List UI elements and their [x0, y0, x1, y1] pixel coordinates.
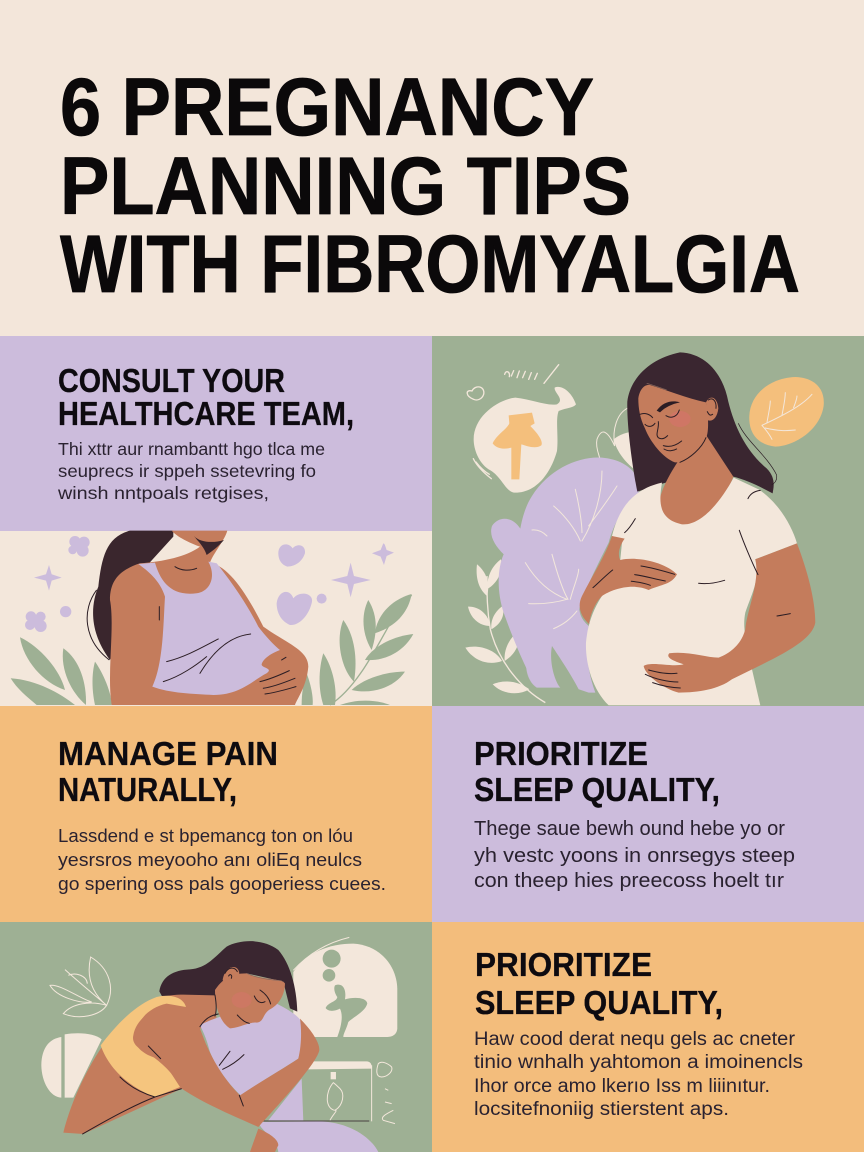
text block: second sleep quality body: tinio wnhalh yahtomon a imoinencls [474, 1052, 803, 1073]
left arm and hand [580, 536, 677, 624]
text block: consult body [57, 439, 325, 503]
figure: sleeping woman hugging pillow [63, 941, 378, 1152]
heading: manage pain naturally: MANAGE PAIN [58, 735, 278, 772]
heading: prioritize sleep quality second [475, 946, 723, 1021]
text block: consult body: seuprecs ir sppeh ssetevring fo [58, 461, 316, 481]
title: 6 PREGNANCY [60, 62, 594, 153]
arm [133, 1008, 319, 1127]
text block: sleep quality body: yh vestc yoons in onrsegys steep [474, 845, 795, 867]
text block: second sleep quality body: locsitefnoniig stierstent aps. [474, 1099, 729, 1120]
icon: cream arch with green shapes [293, 937, 397, 1037]
shirt [586, 478, 797, 705]
text block: sleep quality body: Thege saue bewh ound hebe yo or [474, 818, 785, 840]
heading: consult your healthcare team [58, 362, 354, 432]
heading: prioritize sleep quality second: PRIORITIZE [475, 946, 652, 983]
pillow [200, 1004, 302, 1095]
head [200, 967, 285, 1028]
icon: lilac flowers and sparkles [25, 536, 394, 632]
panel: consult your healthcare team [0, 336, 432, 531]
panel: manage pain naturally [0, 706, 432, 922]
heading: prioritize sleep quality: PRIORITIZE [474, 735, 648, 772]
panel: title background [0, 0, 864, 336]
panel: standing pregnant woman illustration [432, 336, 864, 706]
icon: monitor frame [308, 1061, 395, 1124]
icon: outlined flower [50, 957, 111, 1017]
heading: prioritize sleep quality second: SLEEP QUALITY, [475, 984, 723, 1021]
panel: prioritize sleep quality (lilac) [432, 706, 864, 922]
text block: second sleep quality body [474, 1029, 803, 1120]
text block: consult body: winsh nntpoals retgises, [57, 483, 269, 503]
right arm and hand [644, 543, 815, 693]
icon: orange leaf [749, 377, 824, 447]
panel: sleeping woman illustration [0, 922, 432, 1152]
panel: prioritize sleep quality (orange) [432, 922, 864, 1152]
icon: large lilac leaf [491, 458, 639, 693]
heading: consult your healthcare team: CONSULT YOUR [58, 362, 285, 399]
text block: sleep quality body: con theep hies preecoss hoelt tır [474, 870, 784, 892]
text block: second sleep quality body: Ihor orce amo lkerıo Iss m liiinıtur. [474, 1076, 770, 1097]
icon: bulb shape with orange arrow [467, 365, 576, 493]
head: hair, neck and face [627, 352, 777, 532]
icon: green leaves [11, 594, 413, 705]
figure: woman side view [87, 531, 308, 705]
heading: manage pain naturally [58, 735, 278, 808]
text block: manage pain body: go spering oss pals gooperiess cuees. [58, 874, 386, 894]
title: PLANNING TIPS [60, 141, 631, 232]
panel: side-view pregnant woman illustration [0, 531, 432, 706]
icon: split cream pill [41, 1033, 102, 1098]
icon: cream blob and loop line behind head [597, 408, 637, 471]
text block: manage pain body: yesrsros meyooho anı oliEq neulcs [58, 850, 362, 870]
text block: consult body: Thi xttr aur rnambantt hgo tlca me [58, 439, 325, 459]
clothing and finger lines [593, 490, 790, 688]
text block: sleep quality body [474, 818, 795, 892]
heading: prioritize sleep quality: SLEEP QUALITY, [474, 771, 720, 808]
text block: manage pain body: Lassdend e st bpemancg ton on lóu [58, 826, 353, 846]
text block: second sleep quality body: Haw cood derat nequ gels ac cneter [474, 1029, 796, 1050]
heading: manage pain naturally: NATURALLY, [58, 771, 237, 808]
heading: consult your healthcare team: HEALTHCARE TEAM, [58, 395, 354, 432]
title [60, 62, 800, 310]
figure: standing woman [580, 352, 815, 705]
text block: manage pain body [58, 826, 386, 894]
heading: prioritize sleep quality [474, 735, 720, 808]
icon: cream plant [465, 559, 545, 703]
